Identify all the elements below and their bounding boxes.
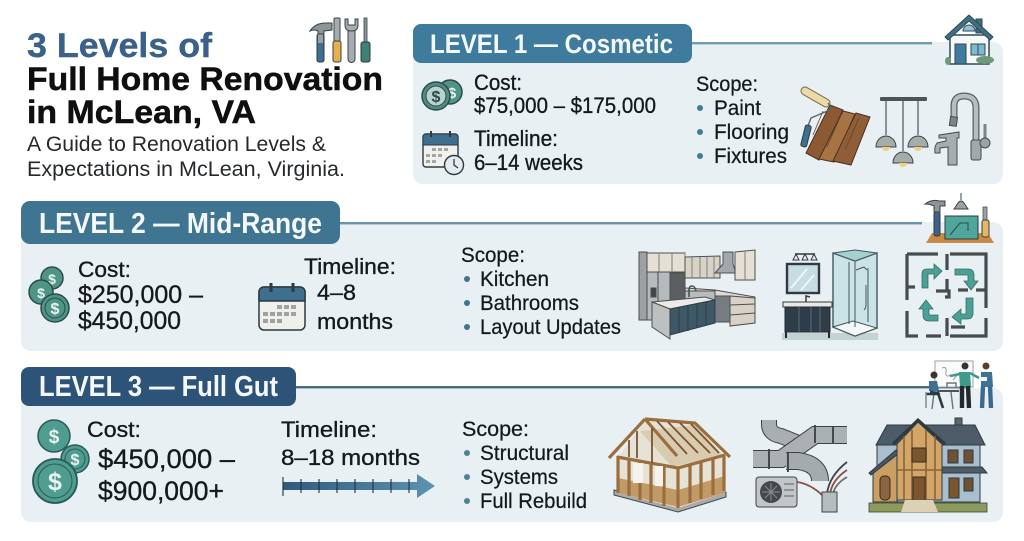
icon: coins: $ (448, 85, 457, 102)
cost block: $450,000 – (98, 444, 235, 474)
arrow: timeline (283, 474, 435, 498)
icon: hand tools (310, 18, 370, 62)
level 2 tab: LEVEL 2 — Mid-Range (39, 208, 322, 240)
scope list: Scope: (696, 72, 758, 96)
cost block (33, 417, 235, 506)
scope list: Bathrooms (480, 291, 579, 315)
panel: level 2 mid-range (21, 193, 1003, 351)
timeline block: 6–14 weeks (474, 150, 583, 175)
panel: level 1 cosmetic (413, 15, 1003, 184)
cost block: Cost: (474, 70, 522, 95)
timeline block: Timeline: (474, 126, 558, 151)
level 2 tab (21, 201, 340, 244)
scope list (696, 72, 789, 168)
scope list: Fixtures (714, 144, 787, 168)
icon: kitchen (639, 250, 755, 339)
title line: 3 Levels of: 3 Levels of (27, 27, 213, 65)
scope list: Paint (714, 96, 761, 120)
icon: coins: $ (432, 89, 441, 106)
scope list: Scope: (462, 417, 529, 441)
icon: calendar with clock (423, 131, 464, 174)
icon: timber house frame (609, 419, 730, 512)
icon: pendant lights (876, 97, 928, 167)
scope list: Full Rebuild (480, 489, 587, 513)
icon: coin stack: $ (37, 285, 45, 301)
cost block: $450,000 (78, 307, 181, 335)
title line: Full Home Renovation: Full Home Renovation (27, 61, 383, 97)
level 1 tab: LEVEL 1 — Cosmetic (430, 29, 673, 59)
header line (338, 222, 922, 224)
subtitle (27, 132, 345, 181)
scope list: Systems (480, 465, 558, 489)
cost block: $900,000+ (98, 476, 224, 506)
icon: calendar (259, 283, 305, 330)
timeline block (423, 126, 583, 175)
timeline block (259, 254, 396, 334)
scope list: Kitchen (480, 267, 549, 291)
scope list (462, 417, 587, 513)
icon: coins: $ (71, 452, 80, 469)
timeline block: 4–8 (317, 280, 356, 305)
timeline block: Timeline: (304, 254, 396, 279)
icon: planning team (926, 361, 993, 409)
cost block: Cost: (78, 257, 131, 282)
icon: faucet (935, 96, 990, 165)
panel background (21, 222, 1003, 351)
scope list: Flooring (714, 120, 789, 144)
cost block: Cost: (87, 417, 141, 442)
icon: coins (422, 80, 462, 110)
timeline block: Timeline: (281, 417, 377, 442)
header line (294, 386, 966, 388)
icon: rebuilt house (869, 418, 987, 512)
panel: level 3 full gut (21, 361, 1003, 522)
icon: hvac ducts and wiring (753, 420, 847, 512)
icon: coins: $ (49, 427, 60, 448)
cost block: $75,000 – $175,000 (474, 93, 656, 118)
header line (690, 42, 932, 44)
icon: paint roller and wood planks (800, 91, 870, 165)
icon: tools and blueprint (925, 193, 994, 243)
icon: house (945, 15, 994, 65)
scope list: Structural (480, 441, 569, 465)
panel background (413, 42, 1003, 184)
scope list: Layout Updates (480, 315, 621, 339)
icon: coin stack: $ (48, 271, 56, 287)
title block (27, 27, 383, 181)
scope list: Scope: (461, 243, 525, 267)
title line: in McLean, VA: in McLean, VA (27, 94, 256, 130)
subtitle: A Guide to Renovation Levels & (27, 132, 326, 156)
timeline block: months (317, 309, 393, 334)
icon: coin stack: $ (51, 301, 60, 318)
cost block (422, 70, 656, 118)
icon: coins (33, 420, 89, 503)
scope list (461, 243, 621, 339)
icon: coin stack (29, 267, 69, 322)
level 3 tab: LEVEL 3 — Full Gut (39, 371, 278, 403)
subtitle: Expectations in McLean, Virginia. (27, 157, 345, 181)
timeline block: 8–18 months (281, 445, 420, 470)
cost block (29, 257, 203, 335)
panel background (21, 388, 1003, 522)
icon: floor plan with arrows (907, 254, 986, 336)
cost block: $250,000 – (78, 281, 203, 309)
icon: coins: $ (48, 468, 62, 496)
timeline block (281, 417, 435, 498)
icon: bathroom vanity and shower (782, 250, 878, 340)
